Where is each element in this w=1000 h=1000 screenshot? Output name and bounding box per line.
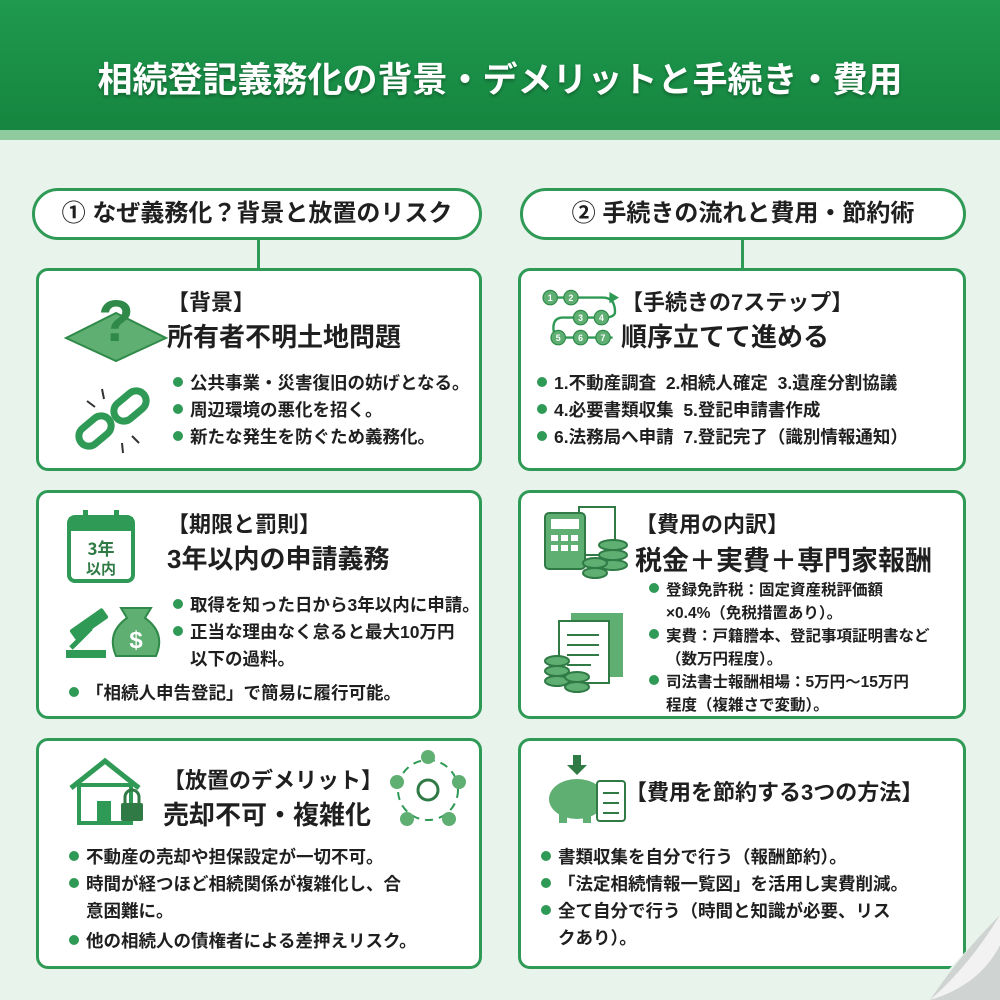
bullets: 4.必要書類収集 5.登記申請書作成 [554, 400, 820, 420]
bullets: 1.不動産調査 2.相続人確定 3.遺産分割協議 [554, 373, 897, 393]
bullets: 登録免許税：固定資産税評価額 [666, 582, 883, 599]
heading: 順序立てて進める [621, 322, 829, 352]
panel: saving [518, 738, 966, 969]
bullets [173, 595, 480, 669]
bullets: 以下の過料。 [190, 649, 295, 669]
heading: 所有者不明土地問題 [167, 322, 401, 352]
icon: numbered steps: 1 [548, 293, 553, 303]
bullets: 公共事業・災害復旧の妨げとなる。 [190, 373, 469, 393]
bullets: 取得を知った日から3年以内に申請。 [190, 595, 480, 615]
bullets: クあり）。 [558, 928, 637, 948]
bullets [69, 847, 417, 951]
bullets: 程度（複雑さで変動）。 [666, 697, 829, 714]
bullets: 司法書士報酬相場：5万円〜15万円 [666, 674, 909, 691]
icon: numbered steps [542, 290, 619, 346]
pill heading left [32, 188, 482, 240]
heading: 【背景】 [167, 290, 255, 315]
bullets: 全て自分で行う（時間と知識が必要、リス [558, 901, 890, 921]
icon: calculator and coins [544, 506, 628, 579]
icon: people cycle [390, 750, 466, 826]
bullets: 時間が経つほど相続関係が複雑化し、合 [86, 874, 401, 894]
bullets: 実費：戸籍謄本、登記事項証明書など [666, 628, 930, 645]
heading: 売却不可・複雑化 [163, 800, 371, 830]
icon: gavel and money bag [66, 607, 160, 658]
panel: deadline: 「相続人申告登記」で簡易に履行可能。 [86, 683, 401, 703]
icon: documents and coins [544, 613, 623, 693]
heading: 【期限と罰則】 [167, 512, 321, 537]
icon: numbered steps: 3 [578, 313, 583, 323]
icon: broken chain [75, 387, 150, 454]
heading: 【費用の内訳】 [635, 512, 789, 537]
icon: calendar: 3年 [87, 535, 115, 560]
pill heading right [520, 188, 966, 240]
bullets: 書類収集を自分で行う（報酬節約）。 [558, 847, 847, 867]
heading [163, 768, 383, 830]
bullets [649, 582, 930, 714]
bullets: 他の相続人の債権者による差押えリスク。 [86, 931, 417, 951]
heading: 3年以内の申請義務 [167, 544, 389, 574]
pill heading left: ① なぜ義務化？背景と放置のリスク [62, 200, 452, 227]
heading [167, 512, 389, 574]
icon: numbered steps: 6 [578, 333, 583, 343]
bullets: 新たな発生を防ぐため義務化。 [190, 427, 435, 447]
heading: 【放置のデメリット】 [163, 768, 383, 793]
panel: deadline [36, 490, 482, 719]
bullets: 「法定相続情報一覧図」を活用し実費削減。 [558, 874, 908, 894]
bullets: 正当な理由なく怠ると最大10万円 [190, 622, 454, 642]
heading: 税金＋実費＋専門家報酬 [635, 546, 932, 576]
pill heading right: ② 手続きの流れと費用・節約術 [572, 200, 914, 227]
bullets: 周辺環境の悪化を招く。 [190, 400, 382, 420]
bullets [541, 847, 908, 948]
icon: question land: ? [98, 289, 134, 354]
bullets [173, 373, 469, 447]
heading [635, 512, 932, 576]
panel: cost breakdown [518, 490, 966, 719]
header band [0, 0, 1000, 130]
icon: calendar: 以内 [86, 558, 116, 579]
bullets: 意困難に。 [86, 901, 174, 921]
panel: background [36, 268, 482, 471]
bullets: （数万円程度）。 [666, 651, 782, 668]
bullets [537, 373, 908, 447]
icon: gavel and money bag: $ [129, 627, 143, 654]
icon: house lock [70, 758, 143, 825]
bullets: 不動産の売却や担保設定が一切不可。 [86, 847, 384, 867]
icon: numbered steps: 2 [569, 293, 574, 303]
bullets: ×0.4%（免税措置あり）。 [666, 605, 842, 622]
icon: calendar [67, 510, 135, 583]
icon: question land [64, 289, 168, 362]
heading: 【手続きの7ステップ】 [621, 290, 853, 315]
panel: neglect [36, 738, 482, 969]
page curl [930, 915, 1000, 1000]
heading [167, 290, 401, 352]
heading [621, 290, 853, 352]
icon: piggy bank [549, 755, 626, 823]
icon: numbered steps: 5 [556, 333, 561, 343]
bullets: 6.法務局へ申請 7.登記完了（識別情報通知） [554, 427, 908, 447]
icon: numbered steps: 7 [601, 333, 606, 343]
heading: 【費用を節約する3つの方法】 [625, 780, 923, 805]
title: 相続登記義務化の背景・デメリットと手続き・費用 [97, 61, 902, 100]
panel: 7 steps [518, 268, 966, 471]
icon: numbered steps: 4 [599, 313, 604, 323]
